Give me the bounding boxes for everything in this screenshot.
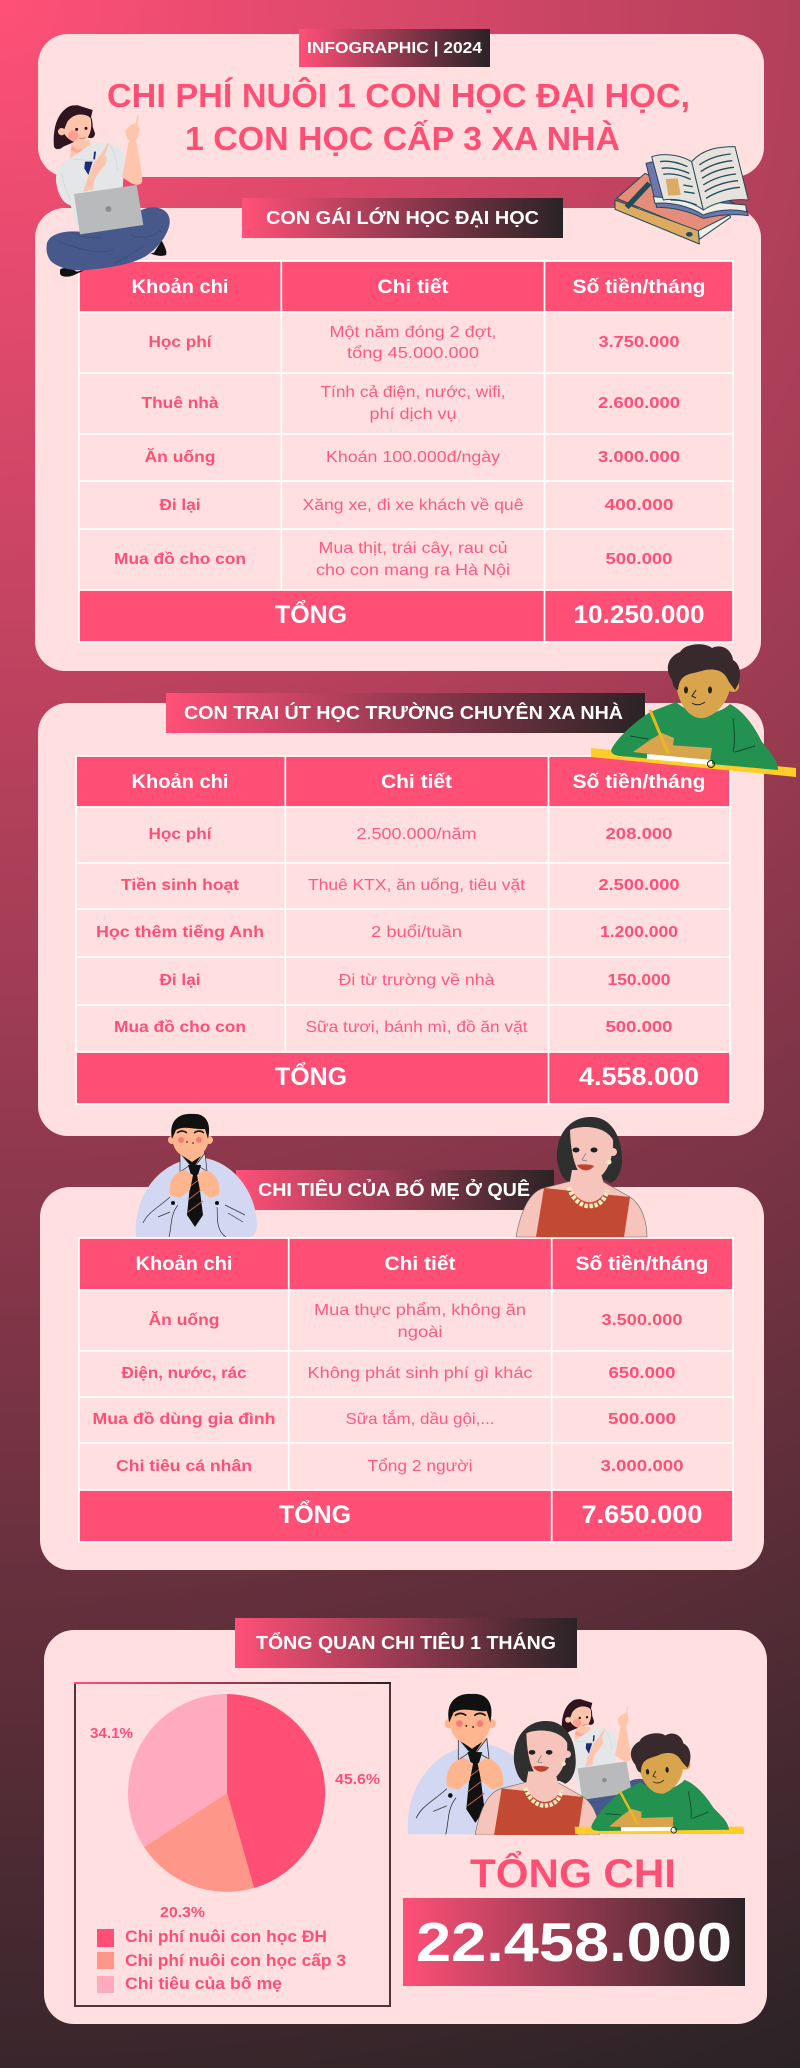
data rows: Không phát sinh phí gì khác bbox=[308, 1365, 532, 1382]
total row: TỔNG bbox=[279, 1499, 351, 1529]
data rows: Mua đồ dùng gia đình bbox=[92, 1411, 276, 1428]
total row bbox=[275, 599, 704, 629]
header row: Chi tiết bbox=[378, 276, 449, 298]
data rows: tổng 45.000.000 bbox=[347, 344, 479, 362]
panel: con trai út học trường chuyên xa nhà bbox=[38, 693, 764, 1136]
table: bố mẹ bbox=[79, 1238, 733, 1542]
data rows: Mua đồ cho con bbox=[114, 551, 246, 568]
legend bbox=[97, 1927, 346, 1993]
header row: Số tiền/tháng bbox=[572, 771, 706, 793]
data rows: Xăng xe, đi xe khách về quê bbox=[302, 497, 524, 514]
illustration: family group bbox=[408, 1694, 744, 1850]
data rows: Ăn uống bbox=[148, 1310, 220, 1329]
data rows: 1.200.000 bbox=[600, 924, 678, 941]
header row bbox=[136, 1253, 708, 1275]
header row: Khoản chi bbox=[136, 1253, 232, 1275]
data rows: Thuê KTX, ăn uống, tiêu vặt bbox=[308, 877, 526, 894]
data rows: 150.000 bbox=[608, 972, 671, 989]
legend: Chi phí nuôi con học cấp 3 bbox=[125, 1951, 346, 1970]
data rows: Mua đồ cho con bbox=[114, 1019, 246, 1036]
data rows bbox=[92, 1301, 684, 1475]
total row bbox=[279, 1499, 702, 1529]
total row bbox=[275, 1061, 699, 1091]
data rows bbox=[114, 324, 680, 579]
table: con trai bbox=[76, 756, 730, 1104]
data rows: cho con mang ra Hà Nội bbox=[316, 562, 510, 579]
data rows: Đi từ trường về nhà bbox=[338, 972, 495, 989]
data rows: Sữa tươi, bánh mì, đồ ăn vặt bbox=[306, 1019, 528, 1036]
label: tổng chi: TỔNG CHI bbox=[470, 1849, 676, 1896]
data rows: 2.500.000/năm bbox=[356, 826, 476, 843]
data rows: 2.500.000 bbox=[598, 877, 680, 894]
pie labels: 34.1% bbox=[90, 1725, 133, 1742]
header row: Khoản chi bbox=[132, 771, 228, 793]
title: CHI PHÍ NUÔI 1 CON HỌC ĐẠI HỌC, bbox=[107, 76, 690, 114]
data rows: 500.000 bbox=[606, 1019, 673, 1036]
illustration: stack of books bbox=[615, 147, 748, 244]
pie labels: 20.3% bbox=[160, 1904, 205, 1921]
illustration: girl with laptop bbox=[46, 105, 170, 277]
data rows: 500.000 bbox=[606, 551, 673, 568]
data rows: Ăn uống bbox=[144, 447, 216, 466]
heading: tổng quan bbox=[235, 1618, 577, 1668]
table: con gái bbox=[79, 261, 733, 642]
illustration: mother bbox=[516, 1117, 647, 1237]
heading: con trai: CON TRAI ÚT HỌC TRƯỜNG CHUYÊN XA NHÀ bbox=[184, 702, 623, 723]
panel: chi tiêu của bố mẹ ở quê bbox=[40, 1170, 764, 1570]
data rows: Thuê nhà bbox=[142, 395, 219, 412]
title bbox=[107, 76, 690, 157]
data rows: 3.750.000 bbox=[598, 334, 680, 351]
tag: infographic 2024: INFOGRAPHIC | 2024 bbox=[307, 40, 482, 57]
total amount box bbox=[403, 1898, 745, 1986]
heading: con gái: CON GÁI LỚN HỌC ĐẠI HỌC bbox=[266, 207, 539, 228]
heading: bố mẹ bbox=[236, 1170, 554, 1210]
data rows: 3.000.000 bbox=[600, 1458, 684, 1475]
data rows: Tổng 2 người bbox=[368, 1457, 472, 1475]
data rows: 400.000 bbox=[604, 497, 674, 514]
title: 1 CON HỌC CẤP 3 XA NHÀ bbox=[185, 120, 620, 157]
data rows: Sữa tắm, dầu gội,... bbox=[346, 1409, 494, 1428]
heading: tổng quan: TỔNG QUAN CHI TIÊU 1 THÁNG bbox=[256, 1632, 556, 1653]
data rows: Một năm đóng 2 đợt, bbox=[330, 324, 496, 341]
heading: con trai bbox=[166, 693, 645, 733]
data rows: Học phí bbox=[148, 826, 212, 843]
total row: 4.558.000 bbox=[579, 1063, 699, 1091]
data rows: Học phí bbox=[148, 334, 212, 351]
data rows: phí dịch vụ bbox=[370, 406, 456, 423]
data rows: Điện, nước, rác bbox=[122, 1365, 247, 1382]
panel: con gái lớn học đại học bbox=[35, 198, 761, 671]
data rows: Mua thực phẩm, không ăn bbox=[314, 1301, 526, 1319]
pie labels bbox=[90, 1725, 380, 1921]
illustration: boy writing bbox=[591, 644, 796, 777]
data rows: ngoài bbox=[398, 1324, 442, 1341]
panel: header bbox=[38, 29, 764, 177]
data rows: Học thêm tiếng Anh bbox=[96, 924, 264, 941]
data rows: 2.600.000 bbox=[598, 395, 680, 412]
panel: tổng quan chi tiêu 1 tháng bbox=[44, 1618, 767, 2024]
total amount box: 22.458.000 bbox=[416, 1911, 732, 1973]
data rows bbox=[96, 826, 680, 1036]
header row: Số tiền/tháng bbox=[576, 1253, 708, 1275]
total row: 7.650.000 bbox=[582, 1501, 702, 1529]
data rows: Khoán 100.000đ/ngày bbox=[326, 449, 500, 466]
data rows: 500.000 bbox=[608, 1411, 676, 1428]
total row: TỔNG bbox=[275, 1061, 347, 1091]
data rows: Mua thịt, trái cây, rau củ bbox=[318, 540, 508, 557]
data rows: 2 buổi/tuần bbox=[371, 923, 462, 941]
header row: Số tiền/tháng bbox=[572, 276, 706, 298]
data rows: Chi tiêu cá nhân bbox=[116, 1458, 252, 1475]
heading: con gái bbox=[242, 198, 563, 238]
tag: infographic 2024 bbox=[299, 29, 490, 67]
header row: Khoản chi bbox=[132, 276, 228, 298]
data rows: Tính cả điện, nước, wifi, bbox=[320, 384, 506, 401]
data rows: 3.000.000 bbox=[598, 449, 680, 466]
data rows: Đi lại bbox=[160, 497, 200, 514]
header row: Chi tiết bbox=[384, 1253, 456, 1275]
data rows: 650.000 bbox=[608, 1365, 676, 1382]
illustration: father bbox=[136, 1114, 257, 1237]
data rows: Đi lại bbox=[160, 972, 200, 989]
pie chart box bbox=[74, 1682, 391, 2006]
legend: Chi phí nuôi con học ĐH bbox=[125, 1927, 327, 1946]
total row: TỔNG bbox=[275, 599, 347, 629]
heading: bố mẹ: CHI TIÊU CỦA BỐ MẸ Ở QUÊ bbox=[258, 1179, 530, 1200]
legend: Chi tiêu của bố mẹ bbox=[125, 1974, 282, 1993]
pie chart bbox=[128, 1694, 325, 1892]
header row bbox=[132, 276, 706, 298]
header row: Chi tiết bbox=[381, 771, 453, 793]
data rows: 3.500.000 bbox=[602, 1312, 683, 1329]
pie labels: 45.6% bbox=[335, 1771, 380, 1788]
header row bbox=[132, 771, 706, 793]
total row: 10.250.000 bbox=[574, 601, 704, 629]
data rows: 208.000 bbox=[606, 826, 673, 843]
data rows: Tiền sinh hoạt bbox=[121, 877, 240, 894]
